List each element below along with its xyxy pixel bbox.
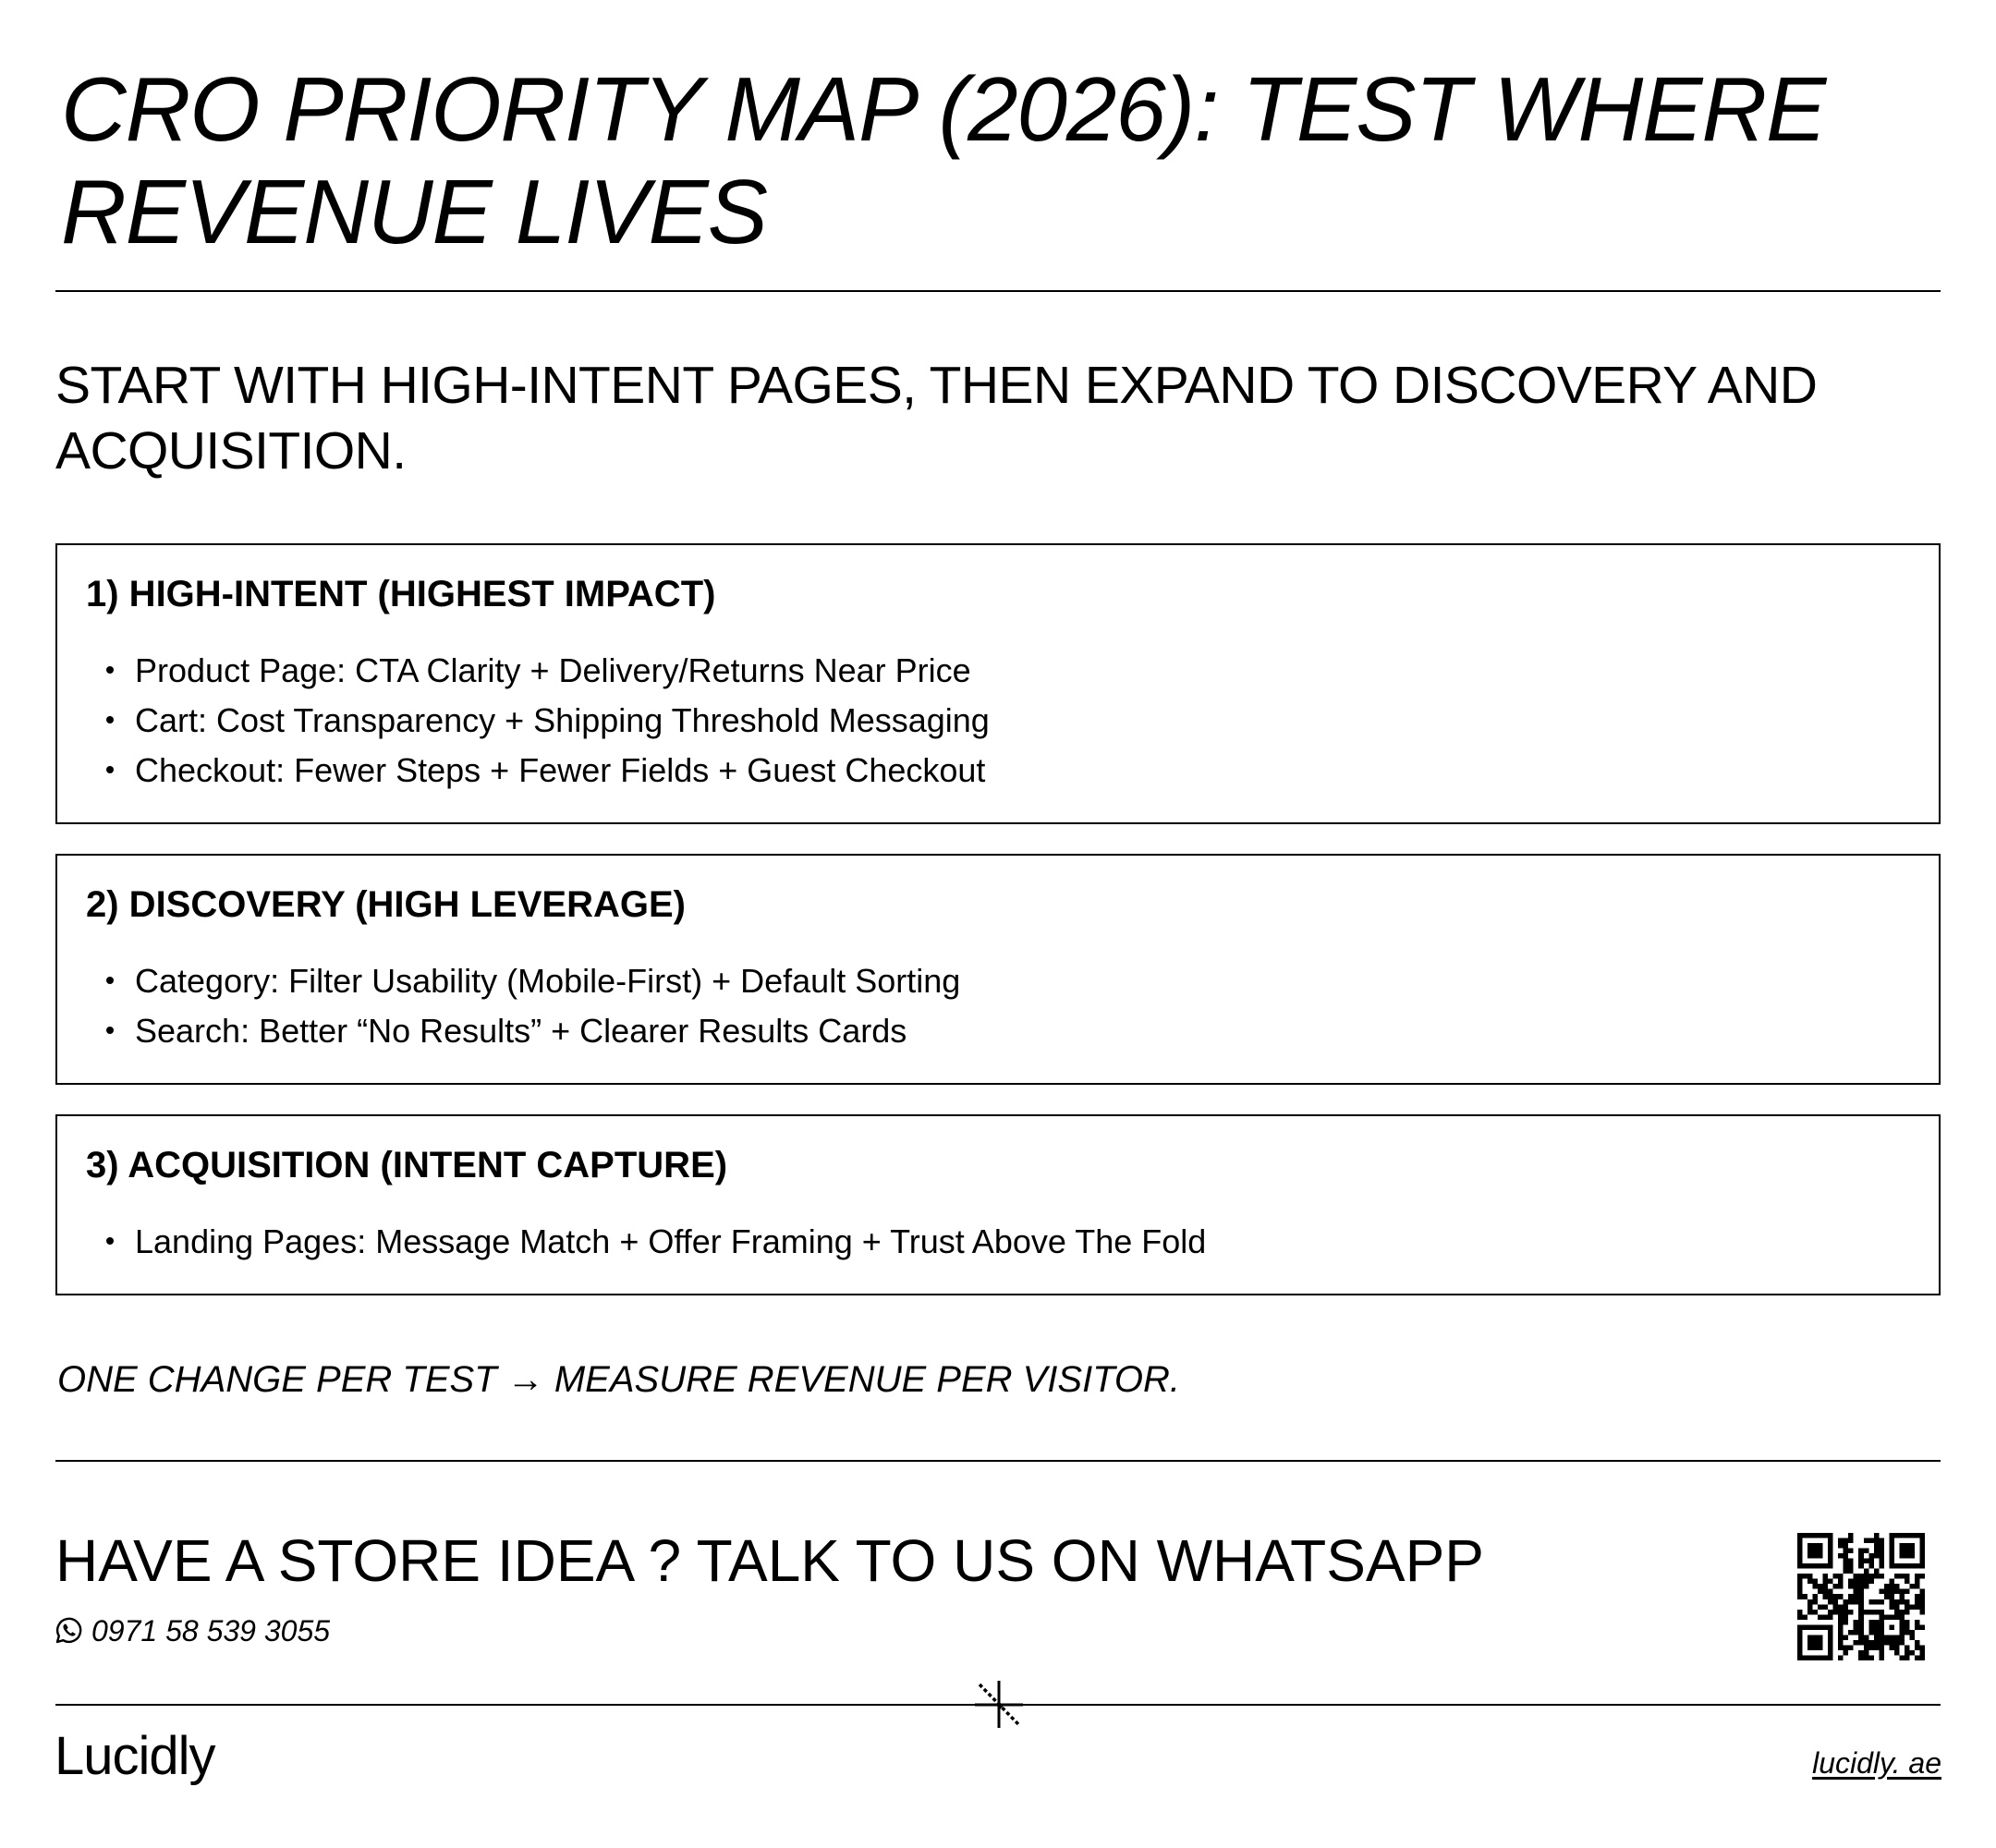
call to action: HAVE A STORE IDEA ? TALK TO US ON WHATSAPP — [55, 1527, 1484, 1594]
panel: acquisition — [55, 1114, 1941, 1295]
panel: discovery — [55, 854, 1941, 1085]
qr code — [1797, 1533, 1925, 1660]
title — [61, 58, 1828, 262]
bullet: cart: Cart: Cost Transparency + Shipping Threshold Messaging — [135, 701, 990, 739]
bullet: landing pages: Landing Pages: Message Match + Offer Framing + Trust Above The Fold — [135, 1222, 1206, 1260]
icon: whatsapp — [55, 1617, 81, 1643]
logo: Lucidly — [55, 1726, 215, 1786]
title: CRO PRIORITY MAP (2026): TEST WHERE — [61, 58, 1825, 160]
subtitle: START WITH HIGH-INTENT PAGES, THEN EXPAND TO DISCOVERY AND — [55, 356, 1817, 415]
title: REVENUE LIVES — [61, 161, 767, 262]
bullet: category: Category: Filter Usability (Mobile-First) + Default Sorting — [135, 962, 960, 1000]
bullet: search: Search: Better “No Results” + Clearer Results Cards — [135, 1012, 907, 1050]
heading: high-intent: 1) HIGH-INTENT (HIGHEST IMPACT) — [86, 574, 715, 614]
heading: discovery: 2) DISCOVERY (HIGH LEVERAGE) — [86, 884, 686, 925]
bullet: checkout: Checkout: Fewer Steps + Fewer Fields + Guest Checkout — [135, 751, 985, 789]
panel: high-intent — [55, 543, 1941, 824]
website link: lucidly. ae — [1812, 1746, 1941, 1780]
bullet: product page: Product Page: CTA Clarity + Delivery/Returns Near Price — [135, 651, 971, 689]
phone number: 0971 58 539 3055 — [91, 1614, 330, 1647]
icon: starburst — [975, 1681, 1023, 1728]
takeaway note: ONE CHANGE PER TEST → MEASURE REVENUE PER VISITOR. — [57, 1359, 1180, 1400]
subtitle: ACQUISITION. — [55, 421, 407, 480]
heading: acquisition: 3) ACQUISITION (INTENT CAPTURE) — [86, 1145, 727, 1185]
subtitle — [55, 356, 1817, 480]
